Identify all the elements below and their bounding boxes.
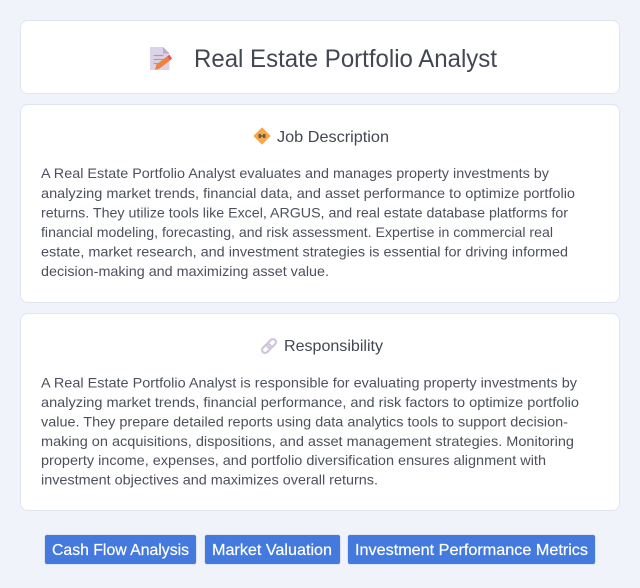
responsibility text: value. They prepare detailed reports using data analytics tools to support decision- (41, 414, 568, 430)
responsibility text (41, 374, 579, 488)
job description text: financial modeling, forecasting, and risk assessment. Expertise in commercial real (41, 224, 553, 240)
tag: market valuation (204, 534, 340, 564)
job description text: returns. They utilize tools like Excel, ARGUS, and real estate database platforms for (41, 204, 568, 220)
job description text: decision-making and maximizing asset value. (41, 263, 329, 279)
panel: responsibility (20, 314, 620, 510)
icon: orange diamond (254, 128, 270, 144)
job description text (41, 165, 575, 279)
responsibility text: A Real Estate Portfolio Analyst is responsible for evaluating property investments by (41, 374, 577, 390)
tag: cash flow analysis (44, 534, 196, 564)
tag: cash flow analysis: Cash Flow Analysis (52, 542, 189, 559)
panel: job description (20, 104, 620, 302)
responsibility text: investment objectives and maximizes overall returns. (41, 472, 378, 488)
title text: Real Estate Portfolio Analyst (194, 45, 497, 73)
tag: investment performance metrics: Investment Performance Metrics (355, 542, 588, 559)
job description text: analyzing market trends, financial data, and asset performance to optimize portfolio (41, 185, 575, 201)
panel: title (20, 20, 620, 94)
responsibility text: analyzing market trends, financial performance, and risk factors to optimize portfolio (41, 394, 579, 410)
icon: chain link (261, 338, 277, 354)
heading: job description: Job Description (277, 129, 389, 146)
icon: document with pencil (150, 47, 172, 70)
job description text: A Real Estate Portfolio Analyst evaluates and manages property investments by (41, 165, 549, 181)
heading: responsibility: Responsibility (284, 338, 383, 355)
responsibility text: making on acquisitions, dispositions, and asset management strategies. Monitoring (41, 433, 574, 449)
responsibility text: property income, expenses, and portfolio diversification ensures alignment with (41, 452, 546, 468)
tag: market valuation: Market Valuation (212, 542, 332, 559)
job description text: estate, market research, and investment strategies is essential for driving informed (41, 244, 568, 260)
tag: investment performance metrics (348, 534, 596, 564)
